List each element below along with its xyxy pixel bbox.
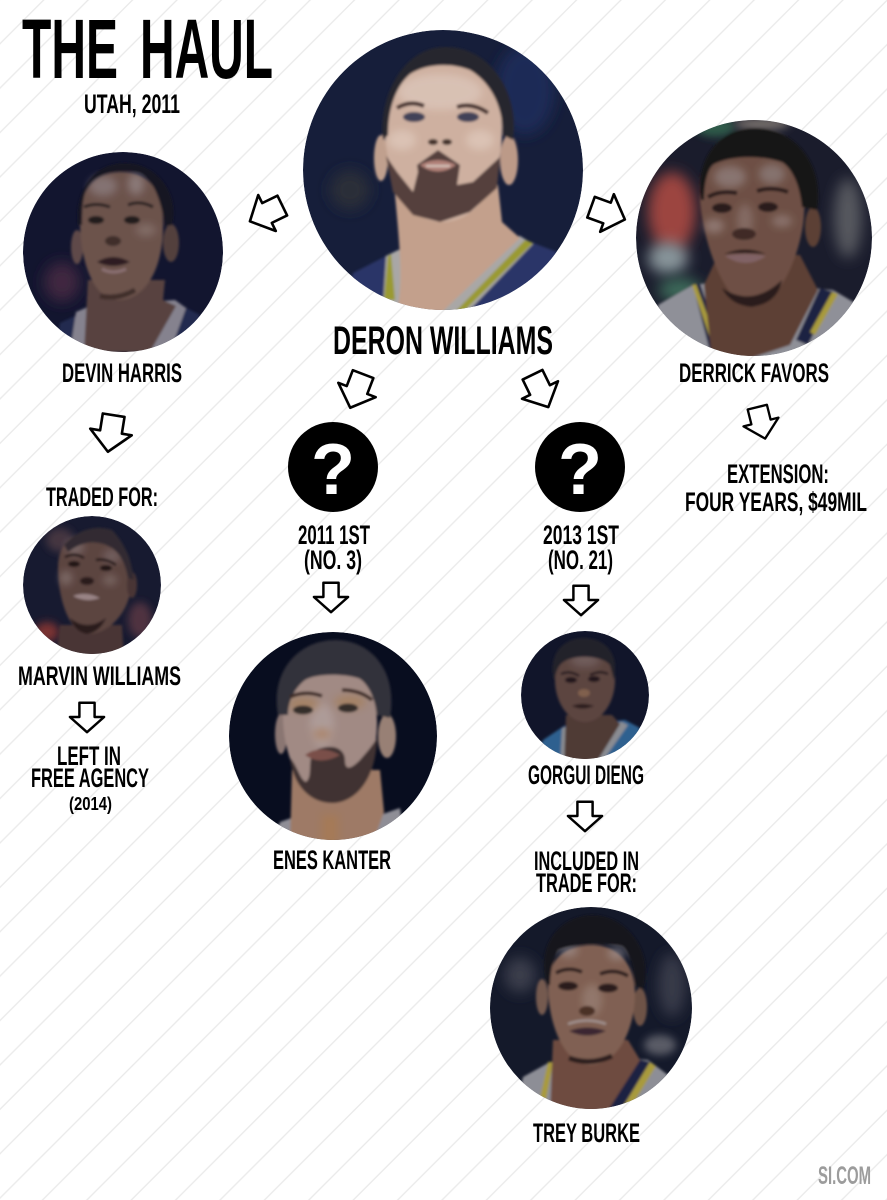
portrait: Enes Kanter	[229, 632, 437, 845]
text: extension	[685, 459, 867, 517]
text: left in free agency	[31, 741, 149, 814]
arrow: Deron to 2011 pick	[332, 367, 382, 415]
title	[22, 2, 273, 96]
icon: question mark (2013 pick): ?	[558, 430, 602, 510]
label: Devin Harris: DEVIN HARRIS	[62, 358, 182, 388]
portrait: Gorgui Dieng	[521, 631, 649, 765]
text: included in trade for: TRADE FOR:	[536, 868, 637, 898]
portrait: Deron Williams	[303, 30, 583, 320]
arrow: Favors to extension	[740, 403, 783, 443]
arrow: 2011 pick to Kanter	[314, 583, 348, 612]
text: traded for: TRADED FOR:	[46, 482, 158, 512]
text: left in free agency: LEFT IN	[57, 741, 121, 771]
text: 2013 first-round pick: 2013 1ST	[543, 520, 619, 550]
arrow: Dieng to trade	[568, 802, 602, 831]
portrait: Devin Harris	[23, 152, 223, 352]
icon: question mark (2013 pick)	[535, 422, 625, 512]
label: Gorgui Dieng: GORGUI DIENG	[528, 760, 644, 790]
title: THE	[22, 2, 118, 96]
label: Deron Williams: DERON WILLIAMS	[333, 319, 553, 363]
text: included in trade for: INCLUDED IN	[534, 846, 639, 876]
arrow: Harris to traded for	[87, 412, 134, 455]
text: 2011 first-round pick	[298, 520, 370, 575]
label: Enes Kanter: ENES KANTER	[273, 845, 391, 875]
text: left in free agency: (2014)	[69, 794, 112, 814]
title: HAUL	[140, 2, 273, 96]
subtitle: UTAH, 2011	[84, 89, 180, 119]
portrait: Marvin Williams	[23, 516, 161, 660]
icon: question mark (2011 pick)	[288, 422, 378, 512]
label: Marvin Williams: MARVIN WILLIAMS	[18, 661, 181, 691]
arrow: Marvin Williams to left in free agency	[70, 703, 104, 732]
portrait: Derrick Favors	[636, 117, 872, 370]
arrow: Deron to Harris	[241, 188, 291, 239]
text: left in free agency: FREE AGENCY	[31, 763, 149, 793]
text: 2013 first-round pick	[543, 520, 619, 575]
arrow: Deron to 2013 pick	[515, 366, 566, 416]
arrow: 2013 pick to Dieng	[564, 586, 598, 615]
text: included in trade for	[534, 846, 639, 898]
text: 2011 first-round pick: 2011 1ST	[298, 520, 370, 550]
text: 2011 first-round pick: (NO. 3)	[304, 545, 362, 575]
text: 2013 first-round pick: (NO. 21)	[548, 545, 613, 575]
portrait: Trey Burke	[490, 907, 692, 1115]
arrow: Deron to Favors	[584, 188, 632, 238]
label: Trey Burke: TREY BURKE	[533, 1118, 640, 1148]
icon: question mark (2011 pick): ?	[311, 430, 355, 510]
